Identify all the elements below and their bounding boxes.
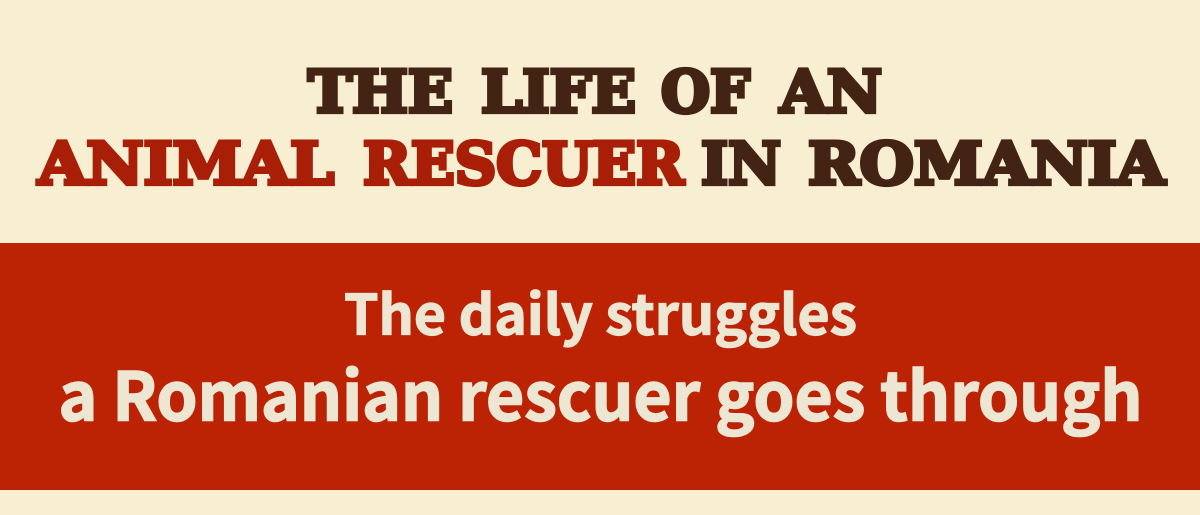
- title: [37, 58, 1166, 198]
- title line 1: LIFE: [481, 58, 636, 126]
- banner background: [0, 243, 1200, 490]
- title line 1: [308, 58, 882, 126]
- title line 2: highlighted phrase: RESCUER: [363, 130, 685, 198]
- subtitle line 1: The daily struggles: [344, 270, 857, 350]
- title line 2: highlighted phrase: ANIMAL: [37, 130, 334, 198]
- title line 2: highlighted phrase: [37, 130, 685, 198]
- subtitle line 2: a Romanian rescuer goes through: [58, 344, 1142, 440]
- subtitle banner: [0, 243, 1200, 490]
- title line 1: THE: [308, 58, 453, 126]
- title line 2: location: IN: [701, 130, 781, 198]
- title line 1: OF: [661, 58, 750, 126]
- title line 1: AN: [779, 58, 882, 126]
- title line 2: location: ROMANIA: [808, 130, 1166, 198]
